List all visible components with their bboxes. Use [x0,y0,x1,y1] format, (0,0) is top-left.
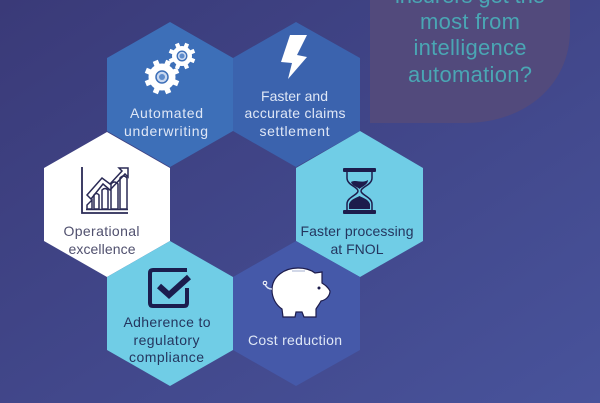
icon: hourglass [343,168,376,214]
icon: gears [139,38,200,100]
label: faster claims settlement: Faster and [261,88,328,104]
panel: regulatory compliance [107,241,233,386]
label: operational excellence: Operational [64,223,140,239]
panel: automated underwriting [107,22,233,167]
panel: faster claims settlement [233,22,360,167]
icon: checkbox [150,270,189,306]
icon: growth chart [82,167,128,213]
callout: question blob: intelligence [414,35,526,60]
label: automated underwriting: underwriting [124,123,208,139]
callout: question blob: automation? [408,62,532,87]
label: adherence to regulatory compliance: Adherence to [124,314,211,330]
label: faster processing at FNOL: at FNOL [330,241,384,257]
label: adherence to regulatory compliance: regulatory [134,332,200,348]
label: faster claims settlement: accurate claims [244,105,346,121]
label: faster claims settlement: settlement [260,123,330,139]
label: adherence to regulatory compliance: compliance [129,349,204,365]
label: operational excellence: excellence [68,241,136,257]
label: faster processing at FNOL: Faster processing [300,223,414,239]
panel: faster processing [296,131,423,277]
callout: question blob: most from [420,9,520,34]
icon: lightning bolt [281,35,307,79]
label: cost reduction: Cost reduction [248,332,342,348]
label: automated underwriting: Automated [130,105,203,121]
callout: question blob [370,0,570,123]
icon: piggy bank [263,268,330,317]
panel: cost reduction [233,241,360,386]
panel: operational excellence [44,132,170,277]
